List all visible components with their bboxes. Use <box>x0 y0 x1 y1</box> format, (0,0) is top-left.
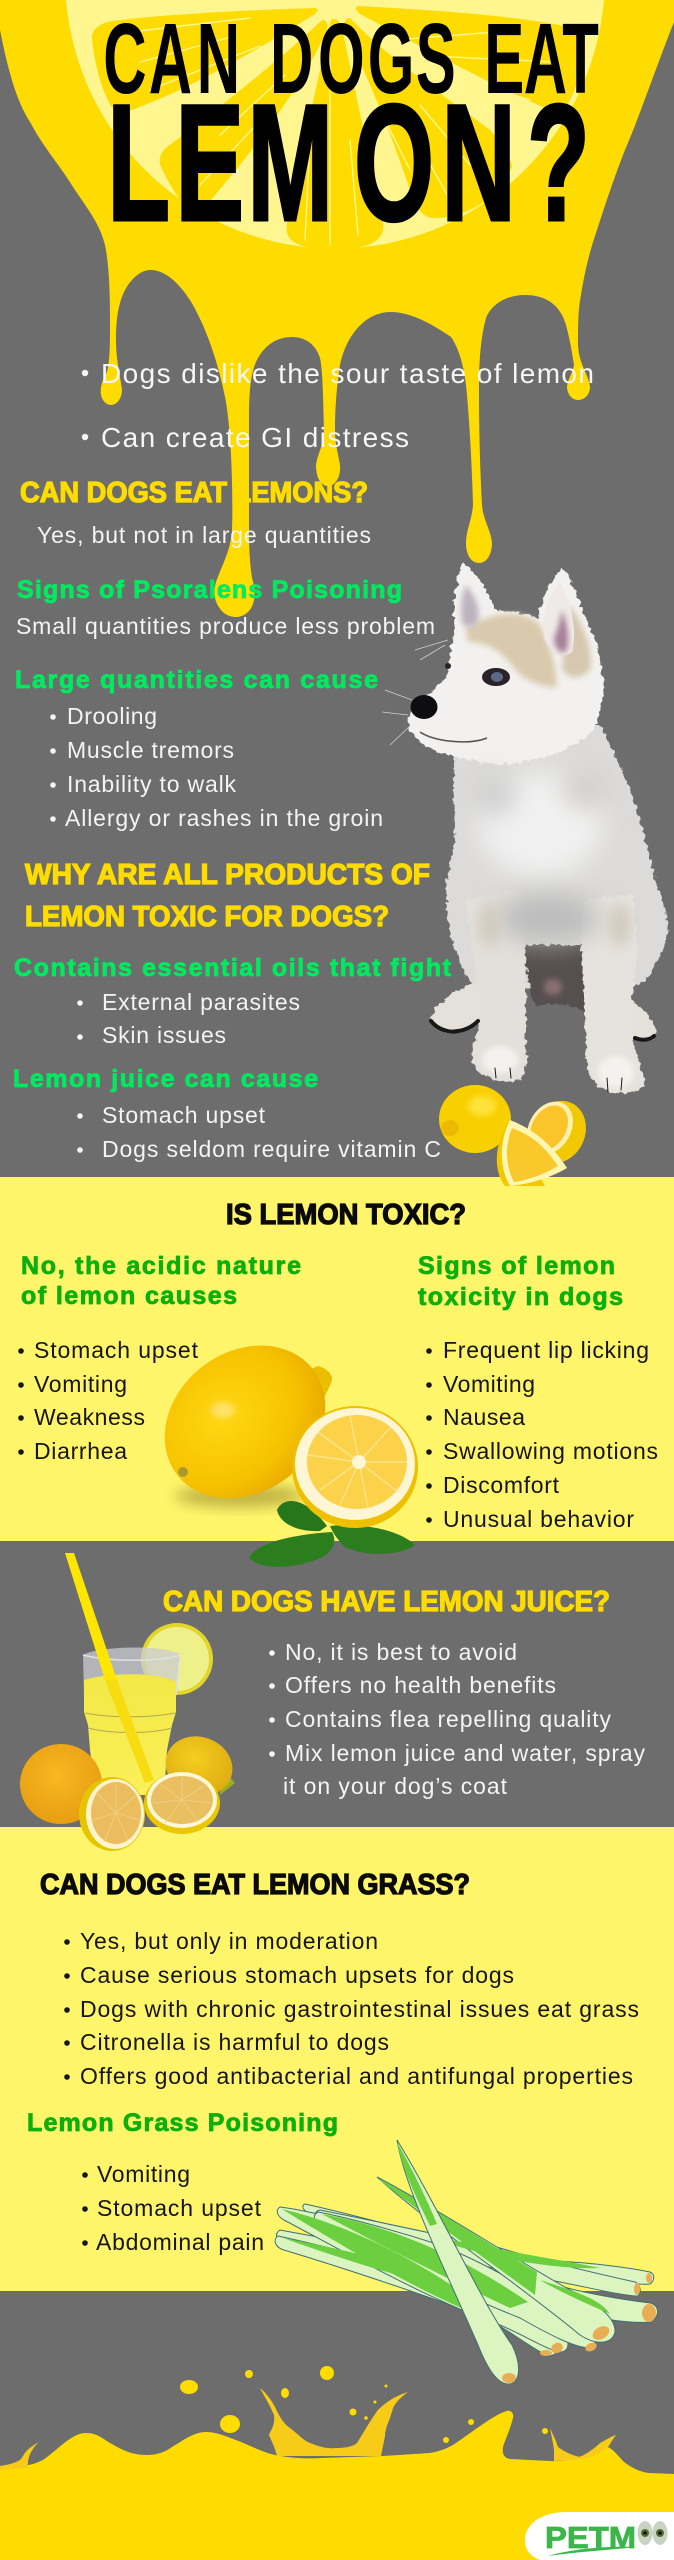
list: lemon grass facts: Cause serious stomach upsets for dogs <box>80 1962 514 1988</box>
list: essential oils: External parasites <box>102 989 300 1015</box>
heading: lemon grass: CAN DOGS EAT LEMON GRASS? <box>40 1869 470 1901</box>
icon: lemon grass stalks <box>275 2140 658 2384</box>
list: lemon grass facts: Dogs with chronic gastrointestinal issues eat grass <box>80 1996 639 2022</box>
logo wordmark: PETM <box>545 2520 636 2555</box>
juice pool <box>0 2411 674 2560</box>
list: lemon juice <box>269 1639 646 1799</box>
heading: is lemon toxic: IS LEMON TOXIC? <box>226 1199 466 1231</box>
puppy mouth <box>420 732 487 742</box>
logo swoosh <box>548 2547 636 2556</box>
subheading: psoralens: Signs of Psoralens Poisoning <box>17 576 402 604</box>
lemon slice on glass <box>141 1623 213 1695</box>
puppy head colouring <box>466 605 591 688</box>
intro bullets <box>82 358 594 453</box>
glass <box>83 1648 180 1795</box>
juice splash at the bottom <box>0 2366 674 2560</box>
list: lemon grass poisoning: Stomach upset <box>97 2195 262 2221</box>
stalk: front tall <box>397 2140 519 2384</box>
title: LEMON? <box>107 71 590 256</box>
subheading: large quantities: Large quantities can cause <box>15 666 378 694</box>
icon: husky puppy <box>382 563 668 1093</box>
list: acidic effects: Vomiting <box>34 1371 127 1397</box>
list: large quantity effects: Drooling <box>67 703 157 729</box>
icon: glass of lemon juice with lemons <box>20 1553 241 1851</box>
list: lemon grass poisoning: Abdominal pain <box>96 2229 264 2255</box>
subheading: signs of toxicity: Signs of lemon <box>418 1252 615 1280</box>
icon: lemons beside puppy <box>439 1085 596 1186</box>
icon: lemon with half and leaves <box>134 1314 418 1567</box>
lemon, left <box>20 1744 102 1824</box>
subheading: lemon juice: Lemon juice can cause <box>13 1065 318 1093</box>
splash crown <box>260 2388 408 2456</box>
stalk: diagonal mid <box>314 2212 595 2348</box>
list: lemon juice: Contains flea repelling quality <box>285 1706 612 1732</box>
list: lemon juice: Mix lemon juice and water, spray <box>285 1740 646 1766</box>
puppy nose <box>410 695 438 719</box>
lemon pulp disc <box>66 0 604 249</box>
list: large quantity effects: Muscle tremors <box>67 737 234 763</box>
list: toxicity signs: Unusual behavior <box>443 1506 634 1532</box>
heading: can dogs eat lemons: CAN DOGS EAT LEMONS? <box>20 477 368 509</box>
list: large quantity effects: Inability to walk <box>67 771 236 797</box>
puppy eye <box>445 663 510 686</box>
lemon half, back <box>518 1092 596 1172</box>
list: toxicity signs <box>426 1337 658 1532</box>
subheading: lemon grass poisoning: Lemon Grass Poisoning <box>27 2109 338 2137</box>
heading: why toxic <box>25 859 430 933</box>
lemon half, front <box>497 1120 567 1186</box>
lemon slice with dripping juice <box>0 0 674 617</box>
lemon segments <box>92 6 585 250</box>
heading: why toxic: LEMON TOXIC FOR DOGS? <box>25 901 389 933</box>
list: large quantity effects <box>50 703 383 831</box>
subheading: signs of toxicity: toxicity in dogs <box>418 1283 623 1311</box>
right ear <box>543 582 574 655</box>
straw <box>65 1553 154 1783</box>
heading: lemon juice: CAN DOGS HAVE LEMON JUICE? <box>163 1586 610 1618</box>
background: grey top section <box>0 0 674 1177</box>
list: lemon juice: No, it is best to avoid <box>285 1639 517 1665</box>
list: lemon grass facts: Yes, but only in moderation <box>80 1928 378 1954</box>
stalk ends <box>502 2273 656 2383</box>
list: acidic effects: Stomach upset <box>34 1337 199 1363</box>
subheading: acidic nature: of lemon causes <box>21 1282 237 1310</box>
lemon half, right <box>144 1772 220 1834</box>
list: lemon grass poisoning: Vomiting <box>97 2161 190 2187</box>
lemon half, left <box>79 1777 145 1851</box>
subheading: acidic nature: No, the acidic nature <box>21 1252 301 1280</box>
pulp highlights <box>130 18 555 245</box>
leaves <box>249 1501 415 1567</box>
fur shading <box>475 772 634 1088</box>
stalk: front tall green tip <box>397 2142 437 2226</box>
stalk: long right <box>303 2204 654 2284</box>
list: lemon grass facts <box>64 1928 639 2089</box>
list: lemon juice effects: Stomach upset <box>102 1102 266 1128</box>
list: toxicity signs: Vomiting <box>443 1371 535 1397</box>
panel: lemon grass <box>0 1827 674 2291</box>
whole lemon <box>134 1314 356 1530</box>
list: lemon grass facts: Offers good antibacterial and antifungal properties <box>80 2063 633 2089</box>
list: lemon juice effects: Dogs seldom require vitamin C <box>102 1136 441 1162</box>
stalk: back diagonal <box>377 2177 615 2342</box>
list: lemon juice: it on your dog’s coat <box>283 1773 508 1799</box>
intro bullets: Dogs dislike the sour taste of lemon <box>101 358 594 389</box>
subheading: signs of toxicity <box>418 1252 623 1311</box>
splash right <box>550 2428 616 2461</box>
list: lemon grass facts: Citronella is harmful to dogs <box>80 2029 389 2055</box>
list: acidic effects <box>18 1337 199 1464</box>
lemon shadow <box>175 1485 305 1507</box>
logo plate <box>525 2512 674 2560</box>
list: lemon juice: Offers no health benefits <box>285 1672 556 1698</box>
list: acidic effects: Weakness <box>34 1404 145 1430</box>
stalk: lower <box>275 2236 559 2356</box>
panel: lemon juice <box>0 1541 674 1827</box>
puppy whiskers <box>382 640 448 745</box>
panel: bottom grey <box>0 2291 674 2560</box>
subheading: essential oils: Contains essential oils that fight <box>14 954 452 982</box>
answer text: Yes, but not in large quantities <box>37 522 371 548</box>
title: CAN DOGS EAT <box>103 3 599 115</box>
list: toxicity signs: Discomfort <box>443 1472 560 1498</box>
psoralens text: Small quantities produce less problem <box>16 613 435 639</box>
intro bullets: Can create GI distress <box>101 422 409 453</box>
lemon half <box>292 1406 418 1528</box>
heading: why toxic: WHY ARE ALL PRODUCTS OF <box>25 859 430 891</box>
puppy belly <box>544 979 562 995</box>
whole lemon <box>439 1085 511 1153</box>
puppy paw shadows <box>431 1021 654 1092</box>
juice drips <box>0 0 674 617</box>
left ear <box>461 585 479 627</box>
list: toxicity signs: Swallowing motions <box>443 1438 658 1464</box>
stalk: middle right <box>316 2210 640 2296</box>
stalk: diagonal long <box>277 2207 568 2352</box>
list: toxicity signs: Nausea <box>443 1404 525 1430</box>
list: large quantity effects: Allergy or rashes in the groin <box>65 805 383 831</box>
lemon, right <box>157 1727 241 1805</box>
list: acidic effects: Diarrhea <box>34 1438 127 1464</box>
logo: PETMOO <box>525 2512 674 2560</box>
list: essential oils <box>77 989 300 1048</box>
stalk: lowest right <box>277 2230 658 2322</box>
stalk greens <box>282 2178 610 2316</box>
list: essential oils: Skin issues <box>102 1022 226 1048</box>
logo eyes <box>638 2521 668 2545</box>
splash left <box>0 2442 39 2470</box>
juice droplets <box>180 2366 548 2443</box>
panel: is lemon toxic <box>0 1177 674 1541</box>
list: lemon juice effects <box>77 1102 441 1162</box>
subheading: acidic nature <box>21 1252 301 1310</box>
list: toxicity signs: Frequent lip licking <box>443 1337 649 1363</box>
list: lemon grass poisoning <box>82 2161 264 2255</box>
